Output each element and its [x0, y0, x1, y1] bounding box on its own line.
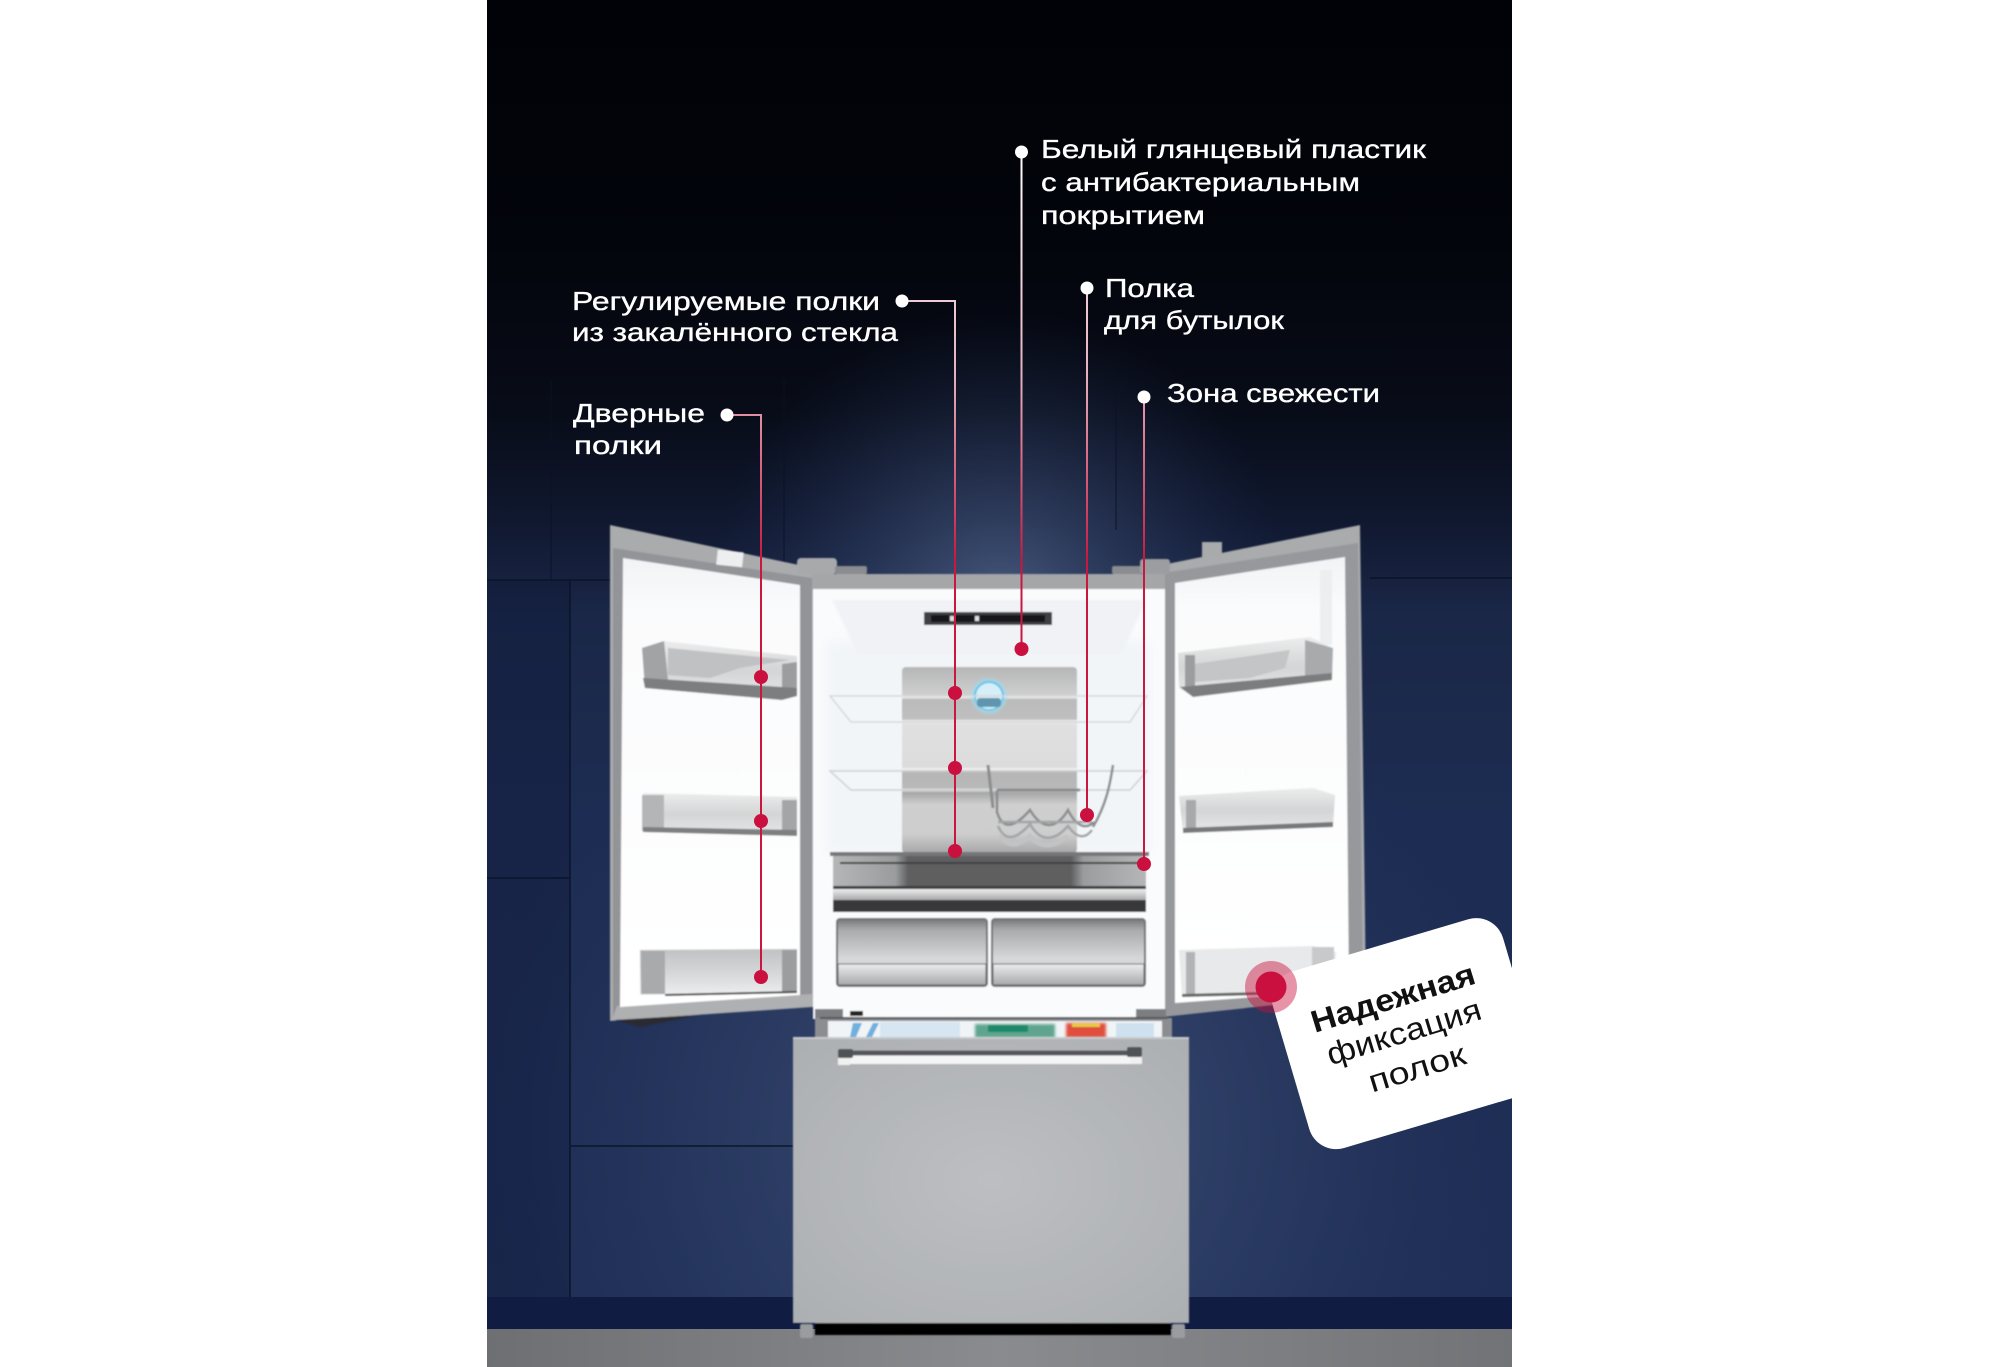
dark kitchen background panel: [487, 0, 1512, 1367]
card text: Надежная: [1307, 956, 1479, 1040]
card text: фиксация: [1322, 992, 1486, 1072]
callout card: reliable shelf fixing: [1245, 918, 1512, 1150]
label: adjustable shelves: из закалённого стекла: [572, 317, 899, 347]
left open door: [610, 525, 813, 1027]
display panel: [924, 612, 1052, 625]
label: adjustable shelves: [572, 286, 899, 347]
bottle rack: [988, 765, 1113, 845]
crisper drawer: [830, 852, 1149, 912]
refrigerator: [610, 525, 1366, 1338]
cabinet interior: [812, 574, 1165, 1019]
right open door: [1162, 525, 1366, 1017]
label: glossy plastic: [1041, 134, 1427, 230]
door bins right: [1178, 637, 1336, 997]
label: door shelves: [573, 398, 705, 460]
freezer handle: [838, 1047, 1142, 1065]
freezer door: [793, 1037, 1189, 1338]
hinges: [797, 558, 1170, 574]
label: glossy plastic: покрытием: [1041, 200, 1205, 230]
glass shelf 2: [830, 771, 1147, 790]
callout lines and markers: [720, 146, 1151, 984]
label: glossy plastic: Белый глянцевый пластик: [1041, 134, 1427, 164]
card background: [1272, 918, 1512, 1150]
label: door shelves: Дверные: [573, 398, 705, 428]
label: freshness zone: Зона свежести: [1167, 378, 1380, 408]
glass shelf 1: [830, 696, 1147, 722]
marker: glossy plastic: [1014, 146, 1028, 656]
freezer compartment: [815, 1017, 1172, 1040]
door bins left: [640, 641, 797, 996]
label: door shelves: полки: [574, 430, 662, 460]
label: bottle shelf: [1104, 273, 1285, 335]
marker: adjustable shelves: [896, 294, 962, 858]
card text: полок: [1364, 1036, 1470, 1099]
bottom drawers: [837, 919, 1145, 986]
label: bottle shelf: для бутылок: [1104, 305, 1285, 335]
label: adjustable shelves: Регулируемые полки: [572, 286, 880, 316]
card text: [1310, 968, 1482, 1092]
card marker: [1245, 961, 1297, 1013]
back wall panel: [902, 667, 1077, 853]
lower hinges: [815, 1009, 1166, 1018]
label: glossy plastic: с антибактериальным: [1041, 167, 1360, 197]
label: bottle shelf: Полка: [1105, 273, 1195, 303]
marker: door shelves: [720, 408, 768, 984]
marker: bottle shelf: [1080, 282, 1094, 822]
marker: freshness zone: [1137, 390, 1151, 871]
logo badge: [971, 678, 1007, 714]
